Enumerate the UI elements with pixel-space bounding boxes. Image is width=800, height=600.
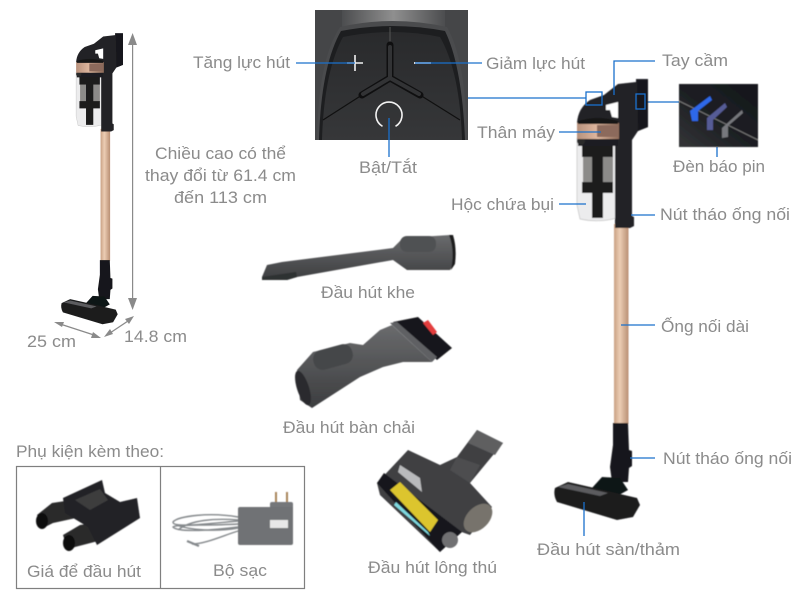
icon: blue LED (690, 96, 712, 121)
depth arrow (104, 316, 134, 337)
label: release button upper: Nút tháo ống nối (660, 205, 790, 224)
label: holder: Giá để đầu hút (27, 562, 141, 581)
label: pet tool: Đầu hút lông thú (368, 558, 497, 577)
label: width: 25 cm (27, 332, 76, 351)
label: handle: Tay cầm (662, 51, 728, 70)
callout lines (296, 63, 717, 157)
label: body: Thân máy (477, 123, 556, 142)
label: floor head: Đầu hút sàn/thảm (537, 540, 680, 559)
label: decrease suction: Giảm lực hút (486, 54, 585, 73)
height note: đến 113 cm (174, 188, 267, 207)
label: brush tool: Đầu hút bàn chải (283, 418, 415, 437)
icon: purple LED (707, 103, 727, 130)
icon: power (376, 102, 402, 126)
label: battery indicator: Đèn báo pin (673, 157, 765, 176)
panel: control buttons close-up (315, 10, 468, 140)
small vacuum with dimensions (27, 33, 187, 351)
heading: accessories: Phụ kiện kèm theo: (16, 442, 164, 461)
label: depth: 14.8 cm (124, 327, 187, 346)
roller band (390, 482, 438, 532)
accessory holder image (36, 480, 140, 551)
charger image (173, 492, 293, 546)
main vacuum (554, 79, 648, 520)
height note (145, 144, 296, 207)
label: release button lower: Nút tháo ống nối (663, 449, 792, 468)
cyan strip (394, 502, 430, 536)
height note: Chiều cao có thể (155, 144, 286, 163)
label: charger: Bộ sạc (213, 561, 268, 580)
label: long tube: Ống nối dài (661, 316, 749, 336)
main vacuum callouts (559, 61, 655, 536)
pet tool (377, 430, 503, 552)
panel: accessories (16, 466, 304, 588)
brush tool (292, 317, 452, 408)
panel: battery indicator (679, 84, 758, 147)
height note: thay đổi từ 61.4 cm (145, 166, 296, 185)
icon: plus (347, 55, 363, 71)
label: power: Bật/Tắt (359, 158, 417, 177)
label: crevice tool: Đầu hút khe (321, 283, 415, 302)
crevice tool (262, 235, 456, 280)
label: increase suction: Tăng lực hút (193, 53, 290, 72)
height arrow (128, 33, 137, 310)
icon: minus (414, 62, 431, 64)
label: dust bin: Hộc chứa bụi (451, 195, 554, 214)
width arrow (54, 322, 101, 338)
icon: grey LED (722, 110, 743, 138)
vacuum side view (61, 33, 123, 324)
